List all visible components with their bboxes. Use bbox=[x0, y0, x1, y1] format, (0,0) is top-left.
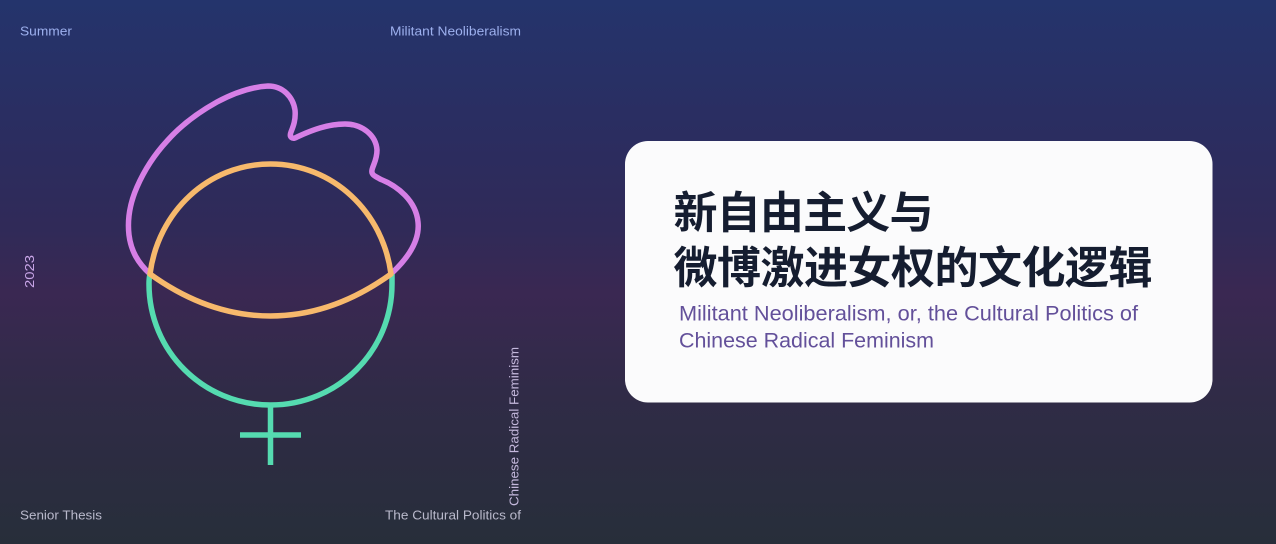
subtitle: English title: Militant Neoliberalism, or, the Cultural Politics of bbox=[679, 302, 1138, 326]
label: Militant Neoliberalism: Militant Neoliberalism bbox=[390, 24, 521, 38]
label: Summer: Summer bbox=[20, 24, 73, 38]
heading: Chinese title: 微博激进女权的文化逻辑 bbox=[674, 244, 1152, 293]
icon: female symbol with hair bbox=[128, 86, 418, 465]
subtitle: English title: Chinese Radical Feminism bbox=[679, 328, 934, 352]
subtitle: English title bbox=[679, 302, 1138, 352]
heading: Chinese title: 新自由主义与 bbox=[674, 189, 934, 238]
label: The Cultural Politics of: The Cultural Politics of bbox=[385, 508, 521, 522]
label: Chinese Radical Feminism vertical: Chinese Radical Feminism bbox=[506, 347, 522, 506]
label: 2023 vertical: 2023 bbox=[22, 255, 37, 288]
icon part: hair outline bbox=[128, 86, 418, 274]
label: Senior Thesis: Senior Thesis bbox=[20, 508, 103, 522]
panel: title card bbox=[625, 141, 1212, 402]
heading: Chinese title bbox=[674, 189, 1152, 293]
icon part: stem and crossbar bbox=[240, 404, 301, 465]
icon part: orange lens bbox=[150, 164, 391, 316]
icon part: lower ring bbox=[149, 274, 392, 405]
